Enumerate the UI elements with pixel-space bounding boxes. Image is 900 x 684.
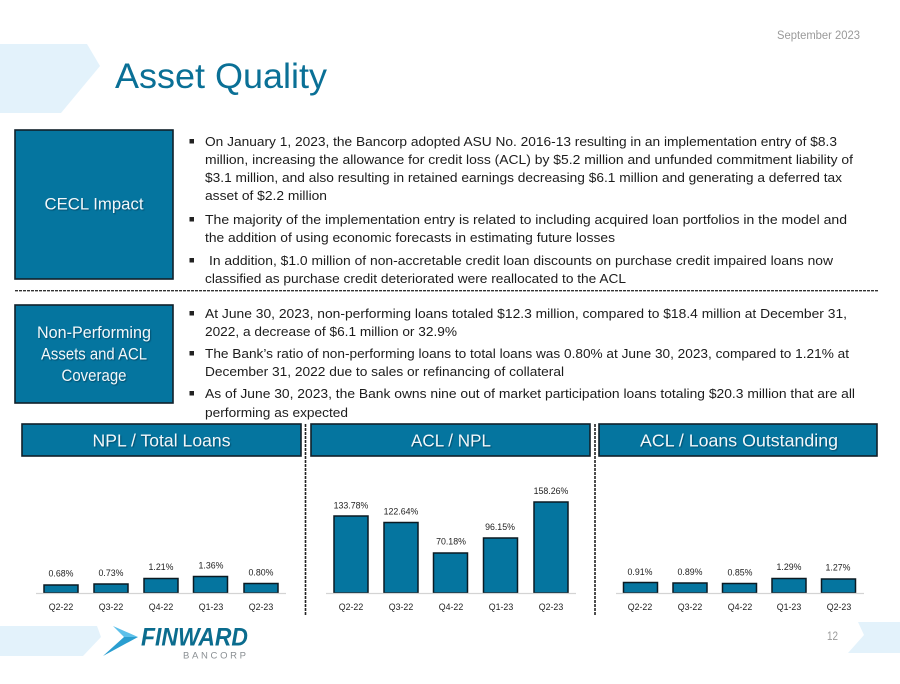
text block: CECL bullets: asset of $2.2 million — [205, 188, 327, 203]
text block: CECL bullets: The majority of the implementation entry is related to including acquired loan portfolios in the model and — [205, 212, 847, 227]
bar chart: ACL / Loans Outstanding: 0.85% — [728, 568, 753, 578]
bar chart: NPL / Total Loans: 1.21% — [149, 562, 174, 572]
text block: CECL bullets: $3.1 million, and also resulting in retained earnings decreasing $6.1 million and generating a deferred tax — [205, 170, 843, 185]
bar chart: ACL / NPL: 96.15% — [485, 522, 515, 532]
text block: CECL bullets: the addition of using economic forecasts in estimating future losses — [205, 230, 616, 245]
bar chart: ACL / NPL: Q2-23 — [539, 602, 563, 612]
bar chart: ACL / Loans Outstanding: 0.89% — [678, 567, 703, 577]
text block: non-performing bullets: performing as expected — [205, 405, 348, 420]
text block: non-performing bullets: 2022, a decrease of $6.1 million or 32.9% — [205, 324, 457, 339]
panel: non-performing assets and ACL coverage: Coverage — [62, 366, 126, 385]
bar chart: ACL / Loans Outstanding: Q2-23 — [827, 602, 851, 612]
bar chart: ACL / Loans Outstanding: 1.27% — [826, 562, 851, 572]
text block: non-performing bullets: December 31, 2022 due to sales or refinancing of collateral — [205, 364, 564, 379]
date: September 2023 — [777, 30, 860, 42]
bar chart: ACL / Loans Outstanding: Q4-22 — [728, 602, 752, 612]
page number: 12 — [827, 629, 838, 643]
panel: ACL / Loans Outstanding chart — [599, 424, 877, 612]
text block: CECL bullets: In addition, $1.0 million of non-accretable credit loan discounts on purchase credit impaired loans now — [209, 253, 834, 268]
text block: CECL bullets: On January 1, 2023, the Bancorp adopted ASU No. 2016-13 resulting in an implementation entry of $8.3 — [205, 134, 837, 149]
text block: non-performing bullets: At June 30, 2023, non-performing loans totaled $12.3 million, compared to $18.4 million at December 31, — [205, 306, 847, 321]
title: Asset Quality — [115, 57, 327, 96]
bar chart: ACL / Loans Outstanding — [616, 562, 864, 612]
bar chart: NPL / Total Loans: Q2-23 — [249, 602, 273, 612]
bar chart: ACL / NPL: 158.26% — [534, 486, 569, 496]
text block: CECL bullets: classified as purchase credit deteriorated were reallocated to the ACL — [205, 271, 626, 286]
panel: CECL impact: CECL Impact — [44, 194, 144, 214]
bar chart: NPL / Total Loans: 0.68% — [49, 568, 74, 578]
decorative chevron: footer left — [0, 626, 101, 656]
panel: non-performing assets and ACL coverage — [15, 305, 173, 403]
bar chart: NPL / Total Loans: Q1-23 — [199, 602, 223, 612]
bar chart: ACL / NPL: Q3-22 — [389, 602, 413, 612]
bar chart: NPL / Total Loans: 0.73% — [99, 568, 124, 578]
panel: CECL impact — [15, 130, 173, 279]
bar chart: NPL / Total Loans: Q3-22 — [99, 602, 123, 612]
bar chart: ACL / Loans Outstanding: Q3-22 — [678, 602, 702, 612]
heading: ACL / NPL — [311, 424, 590, 456]
bar chart: ACL / NPL: 122.64% — [384, 506, 419, 516]
bar chart: NPL / Total Loans: 0.80% — [249, 568, 274, 578]
text block: non-performing bullets: The Bank’s ratio of non-performing loans to total loans was 0.80% at June 30, 2023, compared to 1.21% at — [205, 346, 849, 361]
bar chart: ACL / NPL: 70.18% — [436, 536, 466, 546]
text block: CECL bullets — [190, 134, 853, 286]
decorative chevron: footer right — [848, 622, 900, 653]
bar chart: ACL / Loans Outstanding: 1.29% — [777, 562, 802, 572]
bar chart: NPL / Total Loans: 1.36% — [199, 560, 224, 570]
panel: non-performing assets and ACL coverage: Non-Performing — [37, 323, 151, 342]
bar chart: ACL / NPL: Q2-22 — [339, 602, 363, 612]
heading: ACL / Loans Outstanding: ACL / Loans Outstanding — [640, 430, 838, 450]
bar chart: ACL / Loans Outstanding: 0.91% — [628, 567, 653, 577]
bar chart: NPL / Total Loans: Q4-22 — [149, 602, 173, 612]
text block: CECL bullets: million, increasing the allowance for credit loss (ACL) by $5.2 million and unfunded commitment liability of — [205, 152, 853, 167]
heading: ACL / NPL: ACL / NPL — [411, 430, 491, 450]
text block: non-performing bullets — [190, 306, 855, 420]
panel: ACL / NPL chart — [311, 424, 590, 612]
decorative chevron: title — [0, 44, 100, 113]
logo: Finward Bancorp: BANCORP — [183, 650, 246, 662]
icon: logo arrow — [103, 626, 138, 656]
bar chart: ACL / NPL: Q1-23 — [489, 602, 513, 612]
heading: ACL / Loans Outstanding — [599, 424, 877, 456]
panel: NPL / Total Loans chart — [22, 424, 301, 612]
text block: non-performing bullets: As of June 30, 2023, the Bank owns nine out of market participation loans totaling $20.3 million that are all — [205, 386, 855, 401]
bar chart: ACL / NPL — [326, 486, 576, 612]
logo: Finward Bancorp: FINWARD — [141, 624, 248, 652]
bar chart: ACL / Loans Outstanding: Q2-22 — [628, 602, 652, 612]
heading: NPL / Total Loans — [22, 424, 301, 456]
bar chart: NPL / Total Loans — [36, 560, 286, 612]
bar chart: ACL / NPL: Q4-22 — [439, 602, 463, 612]
bar chart: NPL / Total Loans: Q2-22 — [49, 602, 73, 612]
panel: non-performing assets and ACL coverage: Assets and ACL — [41, 344, 147, 364]
bar chart: ACL / NPL: 133.78% — [334, 500, 369, 510]
heading: NPL / Total Loans: NPL / Total Loans — [92, 430, 231, 450]
logo: Finward Bancorp — [103, 624, 248, 662]
bar chart: ACL / Loans Outstanding: Q1-23 — [777, 602, 801, 612]
